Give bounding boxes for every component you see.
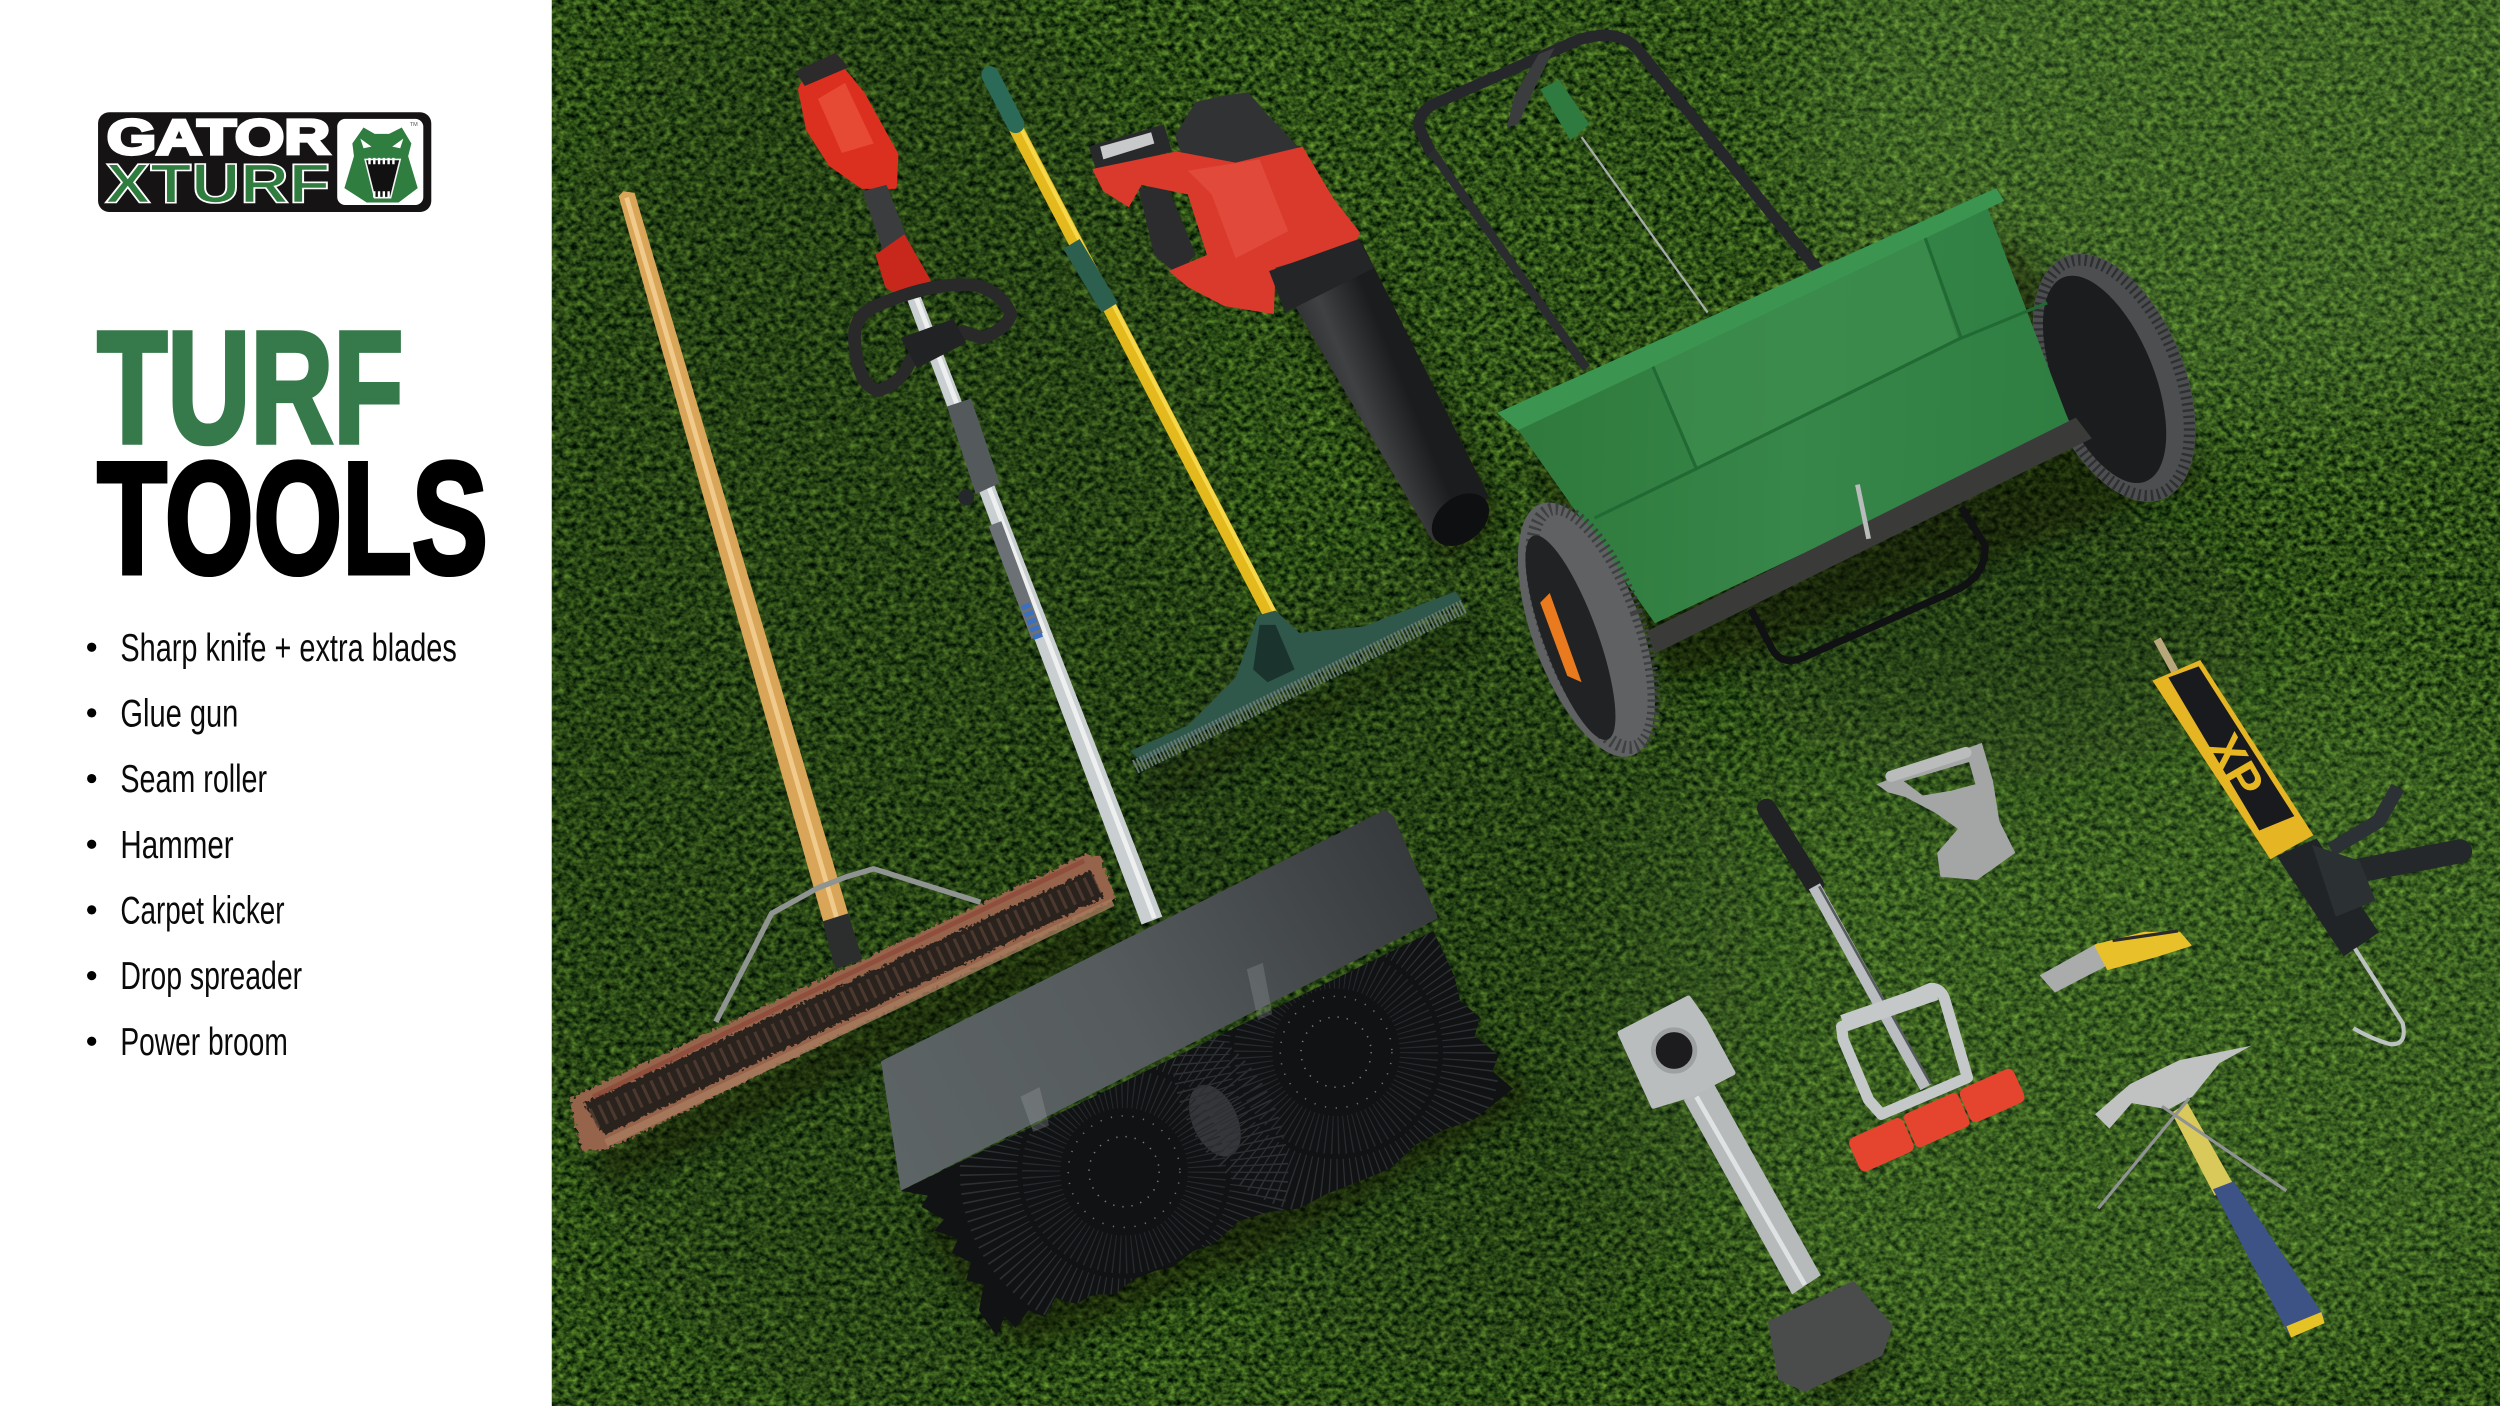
glue gun hook [2353,948,2404,1044]
tool: floor squeegee rake [990,75,1465,767]
hammer end cap [2286,1312,2325,1337]
tool: drop spreader [1419,35,2228,774]
item: seam roller [87,758,267,801]
kicker shaft [1684,1084,1821,1294]
tool: knee kicker [1620,998,1889,1388]
item: carpet kicker [87,889,285,932]
item: sharp knife [87,627,457,670]
knife blade [2041,944,2105,992]
blower battery [1089,124,1172,172]
roller shaft [1814,886,1926,1087]
gripper bar [1891,752,1966,776]
gripper frame [1877,743,2015,880]
white sidebar [0,0,552,1406]
spreader U stand [1751,507,1985,660]
logo plate [98,112,431,212]
knife handle [2095,933,2191,969]
tool shadows [590,239,2208,1403]
item: glue gun [87,692,238,735]
spreader control [1540,80,1590,140]
roller grip [1767,808,1814,885]
motor collar [877,236,930,298]
tool: hammer [2095,1046,2325,1337]
glue gun trigger [2331,787,2398,850]
item: drop spreader [87,955,302,998]
logo gator badge: TM [410,122,418,128]
blower red body [1092,147,1360,314]
red rollers [1847,1067,2027,1173]
bristles [901,917,1513,1336]
broom brace [716,869,981,1022]
rake head [1130,591,1462,762]
blower handle [1138,185,1196,274]
motor battery housing [800,67,896,187]
hopper pin [1857,485,1869,539]
cartridge lettering: XP [2196,725,2274,807]
item: glue gun: Glue gun [120,692,238,735]
item: sharp knife: Sharp knife + extra blades [120,627,457,670]
hopper rim [1497,188,2004,430]
tool: gripper [1877,743,2015,880]
blower collar [1269,239,1374,312]
item: seam roller: Seam roller [120,758,267,801]
logo gator badge [337,119,423,205]
shroud [881,810,1438,1191]
broom head [569,854,1116,1151]
kicker head [1620,998,1733,1106]
item: hammer [87,824,234,867]
shaft label [989,521,1043,639]
kicker dial [1653,1030,1695,1071]
glue gun frame [2277,838,2379,956]
rake grip [990,75,1016,124]
hammer head [2095,1046,2251,1129]
broom handle [619,191,851,931]
hammer shaft [2172,1103,2235,1196]
spreader wire [1582,137,1708,312]
item: carpet kicker: Carpet kicker [120,889,285,932]
logo [98,110,431,214]
tool: push broom [569,191,1116,1151]
roller frame [1842,988,1967,1114]
title line TOOLS: TOOLS [97,429,488,607]
title line TURF: TURF [97,298,403,476]
glue cartridge [2152,660,2313,859]
logo GATOR wordmark: GATOR [107,110,330,165]
glue gun grip [2360,851,2460,870]
title [97,298,488,607]
hopper base bar [1647,418,2092,654]
handle clamp [901,319,966,368]
broom ferrule [823,913,863,969]
glue gun plunger rod tip [2157,639,2175,671]
spreader handle [1419,35,1819,271]
hopper body [1516,206,2071,623]
item: drop spreader: Drop spreader [120,955,302,998]
tool: caulk glue gun [2152,639,2460,1044]
tool: power broom [797,54,1513,1336]
blower nozzle end [1422,482,1499,557]
item: hammer: Hammer [120,824,234,867]
trimmer shaft [902,282,1162,925]
loop handle [854,285,1011,391]
tool: seam roller [1767,808,2027,1173]
blower vent [1175,92,1307,191]
logo XTURF wordmark: XTURF [105,151,330,214]
motor grip [863,185,909,252]
kicker butt pad [1771,1285,1889,1388]
item: power broom: Power broom [120,1021,288,1064]
rake sleeve [1071,244,1110,308]
nails [2098,1098,2189,1208]
rake bristles [1135,606,1465,767]
shaft coupler [947,399,1000,494]
tool: leaf blower [1089,92,1499,557]
tool: utility knife [2041,931,2191,992]
item: power broom [87,1021,288,1064]
grass texture [552,0,2500,1406]
rake pole [1016,128,1271,615]
tool checklist [87,627,457,1064]
left wheel [1490,485,1683,774]
right wheel [2000,230,2228,525]
hammer grip [2213,1181,2325,1336]
blower tube [1272,239,1489,542]
